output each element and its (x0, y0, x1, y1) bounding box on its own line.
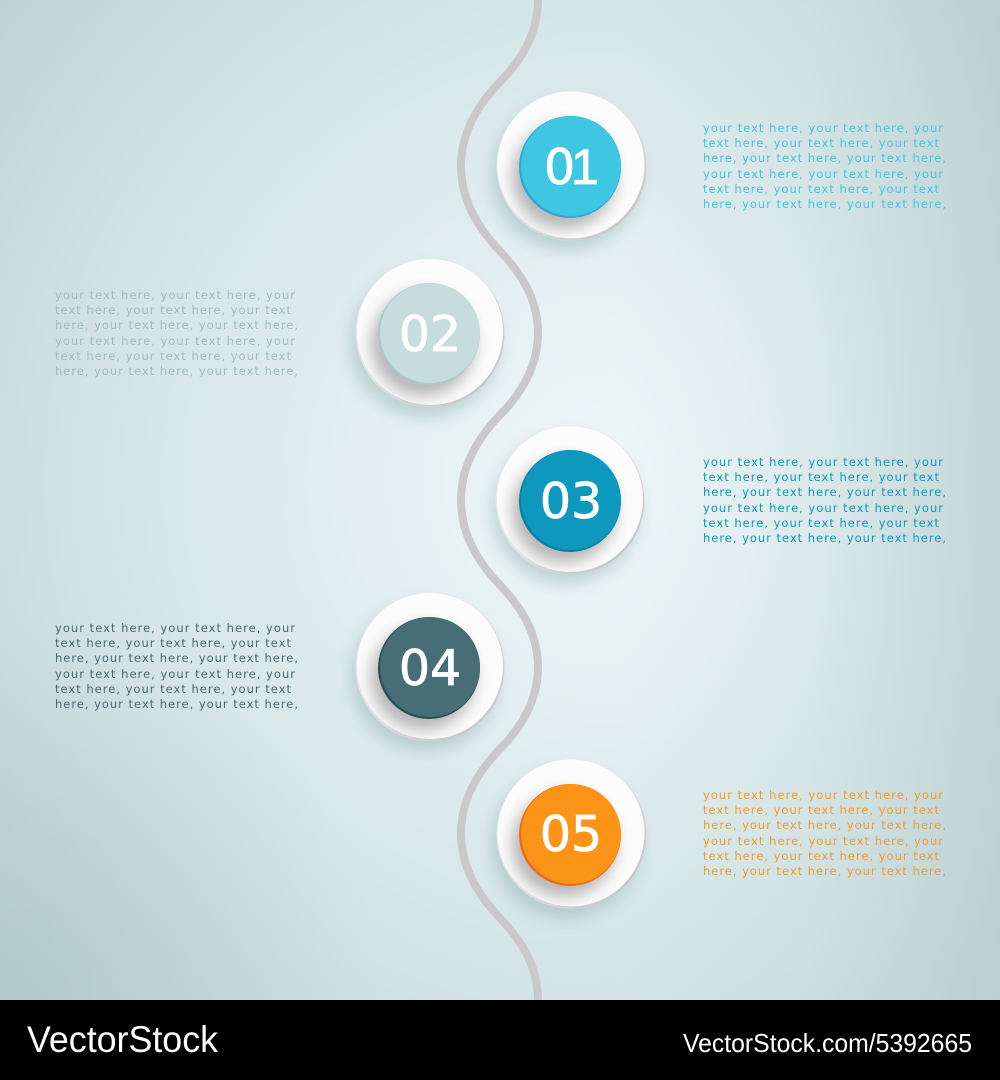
footer url: VectorStock.com/5392665 (683, 1028, 972, 1058)
text block 01: here, your text here, your text here, (703, 197, 946, 211)
plate shadow (492, 102, 640, 250)
text block 02: text here, your text here, your text (55, 303, 291, 317)
text block 04: your text here, your text here, your (55, 667, 295, 681)
text block 04: here, your text here, your text here, (55, 651, 298, 665)
plate rim (356, 258, 504, 408)
text block 03: text here, your text here, your text (703, 470, 939, 484)
number 03: 03 (540, 473, 602, 530)
text block 02: here, your text here, your text here, (55, 318, 298, 332)
connecting wave line (461, 0, 538, 1000)
text block 01 (703, 121, 946, 211)
number 05: 05 (540, 806, 602, 863)
button (519, 116, 621, 218)
text block 01: here, your text here, your text here, (703, 151, 946, 165)
text block 02: here, your text here, your text here, (55, 364, 298, 378)
text block 03: your text here, your text here, your (703, 455, 943, 469)
text block 03: your text here, your text here, your (703, 501, 943, 515)
plate shadow (492, 436, 640, 584)
text block 05: your text here, your text here, your (703, 834, 943, 848)
button shadow (371, 292, 475, 396)
text block 04: text here, your text here, your text (55, 682, 291, 696)
text block 05: here, your text here, your text here, (703, 818, 946, 832)
button (378, 283, 480, 385)
button (519, 784, 621, 886)
plate shadow (351, 269, 499, 417)
text block 05: text here, your text here, your text (703, 849, 939, 863)
text block 05: text here, your text here, your text (703, 803, 939, 817)
number 02: 02 (399, 306, 461, 363)
button (378, 617, 480, 719)
plate (498, 92, 644, 238)
text block 04 (55, 621, 298, 711)
number 01: 1 (571, 139, 599, 195)
text block 05 (703, 788, 946, 878)
text block 02: your text here, your text here, your (55, 334, 295, 348)
text block 01: your text here, your text here, your (703, 167, 943, 181)
button (519, 450, 621, 552)
text block 05: here, your text here, your text here, (703, 864, 946, 878)
text block 01: text here, your text here, your text (703, 182, 939, 196)
text block 02 (55, 288, 298, 378)
text block 02: your text here, your text here, your (55, 288, 295, 302)
plate (498, 760, 644, 906)
text block 04: text here, your text here, your text (55, 636, 291, 650)
text block 04: here, your text here, your text here, (55, 697, 298, 711)
footer bar (0, 1000, 1000, 1080)
plate (497, 426, 643, 572)
text block 04: your text here, your text here, your (55, 621, 295, 635)
button shadow (512, 793, 616, 897)
number 01: 0 (544, 139, 575, 196)
button shadow (371, 626, 475, 730)
plate rim (496, 759, 646, 909)
button shadow (512, 125, 616, 229)
plate rim (496, 426, 644, 574)
text block 01: your text here, your text here, your (703, 121, 943, 135)
plate shadow (351, 603, 499, 751)
text block 02: text here, your text here, your text (55, 349, 291, 363)
step 03 (492, 426, 644, 584)
footer logo: VectorStock (27, 1019, 218, 1060)
text block 03: text here, your text here, your text (703, 516, 939, 530)
text block 03 (703, 455, 946, 545)
step 02 (351, 258, 504, 417)
text block 05: your text here, your text here, your (703, 788, 943, 802)
text block 03: here, your text here, your text here, (703, 531, 946, 545)
plate shadow (492, 770, 640, 918)
step 04 (351, 592, 504, 751)
plate (357, 259, 503, 405)
plate rim (496, 91, 646, 241)
plate (357, 593, 503, 739)
text block 03: here, your text here, your text here, (703, 485, 946, 499)
number 04: 04 (399, 640, 461, 697)
button shadow (512, 459, 616, 563)
plate rim (356, 592, 504, 742)
step 05 (492, 759, 646, 918)
step 01 (492, 91, 646, 250)
text block 01: text here, your text here, your text (703, 136, 939, 150)
